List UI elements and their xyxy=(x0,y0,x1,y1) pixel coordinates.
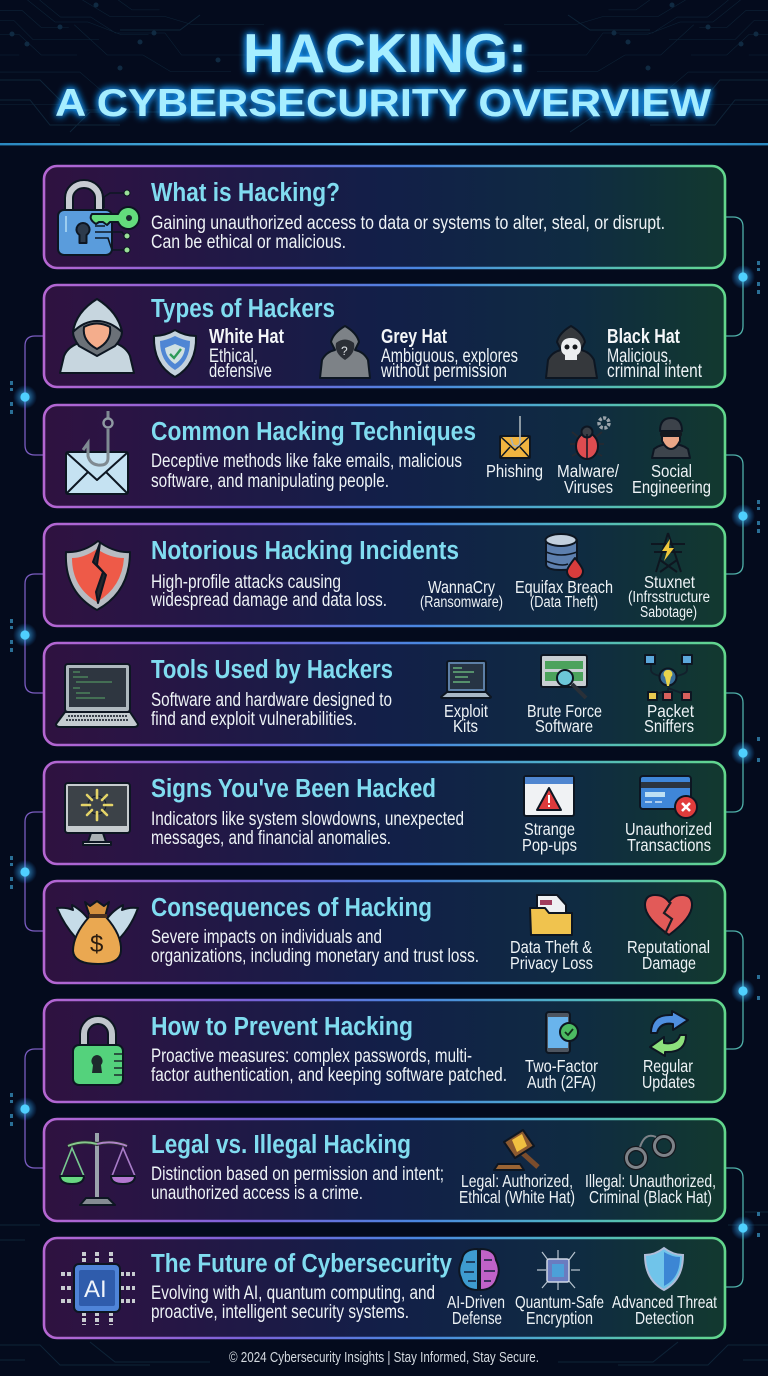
item: data theft xyxy=(510,895,593,973)
item: grey hat: ? xyxy=(341,344,348,358)
item: packet sniffers: Sniffers xyxy=(644,716,694,736)
description: Severe impacts on individuals and xyxy=(151,927,382,948)
item: AI-driven defense: AI-Driven xyxy=(447,1292,505,1312)
item: quantum-safe encryption: Quantum-Safe xyxy=(515,1292,604,1312)
item: brute force software: Software xyxy=(535,716,593,736)
panel: Signs You've Been Hacked xyxy=(44,762,725,864)
item: white hat: White Hat xyxy=(209,326,284,348)
icon: padlock with key xyxy=(58,180,139,255)
item: exploit kits: Kits xyxy=(453,716,478,736)
item: social engineering: Social xyxy=(651,461,692,481)
item: malware xyxy=(557,418,619,497)
item: Equifax breach: (Data Theft) xyxy=(530,594,598,611)
description: Deceptive methods like fake emails, malicious xyxy=(151,451,462,472)
item: regular updates: Regular xyxy=(643,1056,693,1076)
item: reputational damage: Reputational xyxy=(627,937,710,957)
description: Indicators like system slowdowns, unexpected xyxy=(151,809,464,830)
item: quantum-safe encryption: Encryption xyxy=(526,1308,593,1328)
item: unauthorized transactions: Transactions xyxy=(627,835,711,855)
item: legal: Legal: Authorized, xyxy=(461,1171,573,1191)
icon: money bag with wings: $ xyxy=(90,931,103,958)
panel: What is Hacking xyxy=(44,166,725,268)
item: quantum-safe encryption xyxy=(515,1250,604,1328)
panel: Consequences of Hacking xyxy=(44,881,725,983)
item: WannaCry: (Ransomware) xyxy=(420,594,503,611)
description: Distinction based on permission and intent; xyxy=(151,1164,444,1185)
description xyxy=(151,809,464,849)
item: data theft: Privacy Loss xyxy=(510,953,593,973)
circuit pattern top xyxy=(0,0,768,132)
item: reputational damage xyxy=(627,895,710,973)
item: two-factor auth xyxy=(525,1012,598,1092)
item: advanced threat detection xyxy=(612,1248,717,1328)
item: white hat: Ethical, xyxy=(209,346,258,367)
item: AI-driven defense xyxy=(447,1249,505,1328)
item: exploit kits: Exploit xyxy=(444,701,488,721)
heading: Common Hacking Techniques xyxy=(151,418,476,446)
icon: phishing envelope and hook xyxy=(66,411,128,494)
item: packet sniffers: Packet xyxy=(647,701,694,721)
description: Can be ethical or malicious. xyxy=(151,232,346,253)
heading: Consequences of Hacking xyxy=(151,894,432,922)
item: grey hat: without permission xyxy=(380,361,507,382)
circuit pattern bottom xyxy=(0,1212,768,1365)
item: Equifax breach xyxy=(515,534,613,611)
description: find and exploit vulnerabilities. xyxy=(151,709,357,730)
description: Gaining unauthorized access to data or systems to alter, steal, or disrupt. xyxy=(151,213,665,234)
description: Software and hardware designed to xyxy=(151,690,392,711)
item: white hat: defensive xyxy=(209,361,272,382)
description: organizations, including monetary and trust loss. xyxy=(151,946,479,967)
title: A CYBERSECURITY OVERVIEW xyxy=(55,82,711,125)
item: legal xyxy=(459,1130,575,1207)
item: grey hat: Grey Hat xyxy=(381,326,447,348)
item: Stuxnet: Sabotage) xyxy=(640,604,697,621)
item: black hat: criminal intent xyxy=(607,361,703,382)
item: malware: Malware/ xyxy=(557,461,619,481)
item: unauthorized transactions: Unauthorized xyxy=(625,819,712,839)
item: advanced threat detection: Detection xyxy=(635,1308,694,1328)
description xyxy=(150,572,387,611)
footer: © 2024 Cybersecurity Insights | Stay Informed, Stay Secure. xyxy=(229,1349,539,1366)
heading: Tools Used by Hackers xyxy=(151,656,393,684)
description xyxy=(151,1283,435,1323)
heading: How to Prevent Hacking xyxy=(151,1013,413,1041)
heading: Types of Hackers xyxy=(151,295,335,323)
item: regular updates: Updates xyxy=(642,1072,695,1092)
item: packet sniffers xyxy=(644,655,694,736)
icon: monitor with spinner xyxy=(65,783,130,845)
description: software, and manipulating people. xyxy=(151,471,389,492)
panel: Tools Used by Hackers xyxy=(44,643,725,745)
item: malware: Viruses xyxy=(564,477,613,497)
panel: Common Hacking Techniques xyxy=(44,405,725,507)
panel: Legal vs. Illegal Hacking xyxy=(44,1119,725,1221)
description: messages, and financial anomalies. xyxy=(151,828,391,849)
heading: Legal vs. Illegal Hacking xyxy=(151,1131,411,1159)
item: unauthorized transactions xyxy=(625,776,712,855)
icon: money bag with wings xyxy=(57,901,138,964)
item: white hat xyxy=(154,326,284,382)
icon: green padlock xyxy=(73,1016,123,1085)
panel: The Future of Cybersecurity xyxy=(44,1238,725,1338)
item: illegal: Criminal (Black Hat) xyxy=(589,1187,712,1207)
description xyxy=(151,690,392,730)
description: proactive, intelligent security systems. xyxy=(151,1302,409,1323)
panel: Notorious Hacking Incidents xyxy=(44,524,725,626)
panel: Types of Hackers xyxy=(44,285,725,387)
connector lines xyxy=(10,217,760,1287)
item: reputational damage: Damage xyxy=(642,953,696,973)
item: brute force software xyxy=(527,655,602,736)
icon: scales of justice xyxy=(60,1133,135,1205)
icon: AI chip xyxy=(61,1252,135,1325)
item: black hat xyxy=(546,326,703,382)
description: High-profile attacks causing xyxy=(151,572,341,593)
description xyxy=(151,1164,444,1204)
item: two-factor auth: Auth (2FA) xyxy=(527,1072,596,1092)
item: black hat: Black Hat xyxy=(607,326,680,348)
heading: What is Hacking? xyxy=(151,179,340,207)
item: regular updates xyxy=(642,1011,695,1092)
item: strange pop-ups: Strange xyxy=(524,819,575,839)
icon: broken shield xyxy=(66,541,130,610)
item: strange pop-ups xyxy=(522,776,577,855)
item: two-factor auth: Two-Factor xyxy=(525,1056,598,1076)
description xyxy=(151,213,665,253)
description xyxy=(151,451,462,492)
item: advanced threat detection: Advanced Threat xyxy=(612,1292,717,1312)
panel: How to Prevent Hacking xyxy=(44,1000,725,1102)
item: illegal xyxy=(585,1136,716,1207)
header divider xyxy=(0,143,768,145)
item: WannaCry: WannaCry xyxy=(428,577,495,597)
item: social engineering: Engineering xyxy=(632,477,711,497)
item: AI-driven defense: Defense xyxy=(452,1308,502,1328)
item: brute force software: Brute Force xyxy=(527,701,602,721)
item: phishing xyxy=(486,416,543,481)
description: widespread damage and data loss. xyxy=(150,590,387,611)
description xyxy=(151,1046,507,1086)
item: Equifax breach: Equifax Breach xyxy=(515,577,613,597)
item: legal: Ethical (White Hat) xyxy=(459,1187,575,1207)
item: Stuxnet xyxy=(628,533,710,621)
item: black hat: Malicious, xyxy=(607,346,672,367)
item: WannaCry xyxy=(420,577,503,611)
description: unauthorized access is a crime. xyxy=(151,1183,363,1204)
description: factor authentication, and keeping software patched. xyxy=(151,1065,507,1086)
item: Stuxnet: (Infrsstructure xyxy=(628,589,710,606)
heading: The Future of Cybersecurity xyxy=(151,1250,453,1278)
item: strange pop-ups: Pop-ups xyxy=(522,835,577,855)
item: data theft: Data Theft & xyxy=(510,937,592,957)
description xyxy=(151,927,479,967)
item: phishing: Phishing xyxy=(486,461,543,481)
item: grey hat: Ambiguous, explores xyxy=(381,346,518,367)
icon: laptop with code xyxy=(56,664,138,727)
description: Proactive measures: complex passwords, multi- xyxy=(151,1046,472,1067)
description: Evolving with AI, quantum computing, and xyxy=(151,1283,435,1304)
item: exploit kits xyxy=(441,661,491,736)
icon: hooded user xyxy=(60,299,134,373)
item: grey hat xyxy=(320,326,518,382)
heading: Notorious Hacking Incidents xyxy=(151,537,459,565)
heading: Signs You've Been Hacked xyxy=(151,775,436,803)
title xyxy=(55,22,711,125)
item: social engineering xyxy=(632,418,711,497)
item: illegal: Illegal: Unauthorized, xyxy=(585,1171,716,1191)
title: HACKING: xyxy=(243,22,527,84)
item: Stuxnet: Stuxnet xyxy=(644,572,695,592)
icon: AI chip: AI xyxy=(84,1276,107,1303)
